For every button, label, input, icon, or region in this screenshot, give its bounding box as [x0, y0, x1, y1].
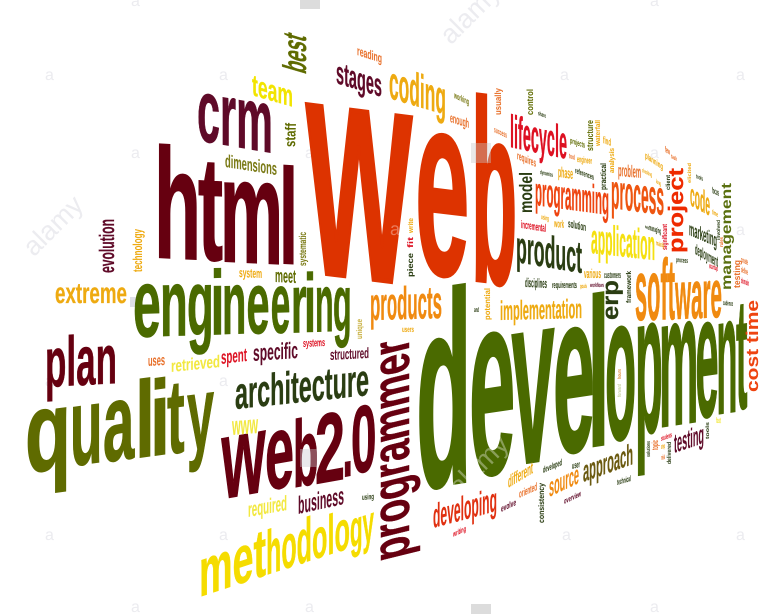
small words: lower-right region: developed: [543, 457, 562, 475]
small words: left region: staff: [281, 123, 299, 147]
small words: middle-right region: write: [407, 218, 415, 233]
word: quality: y: [187, 354, 214, 474]
small words: lower-right region: step: [661, 442, 665, 451]
small words: upper-centre region: checking: [642, 167, 652, 178]
small words: middle-right region: [406, 213, 633, 320]
small words: left region: spent: [221, 344, 247, 368]
word cloud: plan: [45, 320, 117, 402]
small words: middle-right region: framework: [625, 271, 633, 303]
small words: lower-right region: different: [508, 458, 533, 492]
small words: far-right cluster: involved: [715, 220, 721, 240]
word: development: o: [605, 249, 636, 487]
word: methodology: gy: [350, 493, 374, 559]
stock photo watermarks: a: [45, 526, 54, 544]
stock photo watermarks: a: [560, 66, 569, 84]
small words: middle-right region: solution: [568, 217, 586, 233]
small words: far-right cluster: startup: [709, 262, 718, 273]
word: html: [154, 117, 298, 297]
word: quality: [25, 354, 214, 498]
word: crm: crm: [197, 60, 273, 173]
word: development: m: [659, 253, 698, 468]
word: development: d: [416, 236, 472, 549]
word: methodology: [199, 493, 374, 612]
small words: middle-right region: goals: [580, 283, 587, 289]
word cloud: tools: [696, 173, 703, 182]
small words: middle-right region: and: [474, 306, 479, 314]
small words: upper-centre region: analysis: [608, 148, 616, 173]
small words: upper-centre region: client: [665, 175, 671, 190]
small words: lower-right region: fast: [716, 416, 721, 425]
word: html: h: [154, 117, 201, 294]
word cloud: code: [690, 176, 710, 223]
watermarks over the words: alamy: [442, 429, 515, 501]
word cloud: structured: [330, 344, 369, 363]
word cloud: product: [516, 221, 582, 283]
small words: far-right cluster: cadence: [723, 299, 733, 308]
small words: lower-right region: [453, 369, 721, 539]
word: quality: u: [70, 363, 103, 490]
word: engineering: n: [222, 252, 246, 354]
word: engineering: r: [291, 257, 307, 351]
small words: left region: systems: [303, 336, 325, 349]
word: methodology: met: [199, 514, 266, 612]
small words: lower-right region: user: [572, 459, 580, 471]
small words: far-right cluster: significant: [661, 224, 669, 250]
word cloud: evolution: [95, 219, 119, 273]
small words: left region: reading: [357, 43, 382, 66]
word: quality: l: [135, 358, 155, 482]
word cloud: source: [549, 459, 579, 503]
word: Web: [306, 37, 517, 342]
small words: far-right cluster: process: [676, 256, 688, 265]
word cloud: model: [516, 172, 536, 213]
word: erp: erp: [597, 280, 623, 320]
stock photo watermarks: a: [736, 66, 745, 84]
word: development: l: [588, 255, 609, 493]
word: development: e: [469, 236, 515, 534]
word: engineering: e: [133, 249, 161, 358]
word cloud: team: [252, 68, 293, 114]
small words: far-right cluster: mainly: [656, 239, 664, 250]
word cloud: hours: [616, 369, 622, 379]
stock photo watermarks: a: [736, 221, 745, 239]
small words: upper-centre region: share: [538, 110, 546, 119]
word cloud: structure: [585, 120, 595, 151]
small words: lower-right region: technical: [617, 474, 631, 487]
small words: upper-centre region: problem: [618, 161, 641, 182]
stock photo watermarks: a: [45, 66, 54, 84]
small words: left region: system: [239, 265, 262, 281]
word cloud: create: [741, 255, 748, 267]
word: engineering: i: [210, 252, 225, 355]
word: web2.0: 0: [351, 384, 376, 495]
word cloud: coding: [389, 56, 446, 125]
word cloud: specific: [253, 337, 298, 366]
word: software: soft: [635, 242, 675, 339]
small words: lower-right region: tools: [704, 422, 710, 439]
small words: middle-right region: workflows: [590, 282, 604, 288]
word: development: v: [512, 238, 555, 519]
small words: upper-centre region: phase: [558, 163, 573, 182]
small words: left region: www: [232, 410, 258, 441]
small words: upper-centre region: few: [665, 144, 670, 157]
small words: upper-centre region: dynamics: [540, 169, 553, 178]
small words: far-right cluster: focus: [712, 185, 719, 198]
small words: middle-right region: piece: [406, 253, 415, 277]
word: development: [416, 236, 748, 549]
small words: left region: systematic: [297, 232, 308, 266]
small words: lower-right region: students: [661, 431, 672, 443]
word cloud: control: [525, 89, 535, 115]
small words: left region: uses: [148, 351, 165, 369]
stock photo watermarks: a: [45, 372, 54, 390]
word: quality: q: [25, 365, 71, 498]
word: quality: a: [103, 359, 135, 486]
small words: far-right cluster: managing: [649, 223, 661, 236]
word cloud: lifecycle: [510, 106, 567, 169]
small words: middle-right region: fit: [406, 237, 415, 248]
small words: middle-right region: potential: [483, 288, 492, 320]
small words: left region: required: [248, 491, 287, 522]
small words: lower-right region: oriented: [519, 480, 537, 500]
stock photo watermarks: a: [650, 144, 659, 162]
word: engineering: n: [315, 257, 334, 350]
small words: lower-right region: risk: [661, 453, 665, 462]
stock photo watermarks: a: [219, 526, 228, 544]
small words: lower-right region: evolve: [501, 497, 516, 514]
word: Web: b: [471, 48, 517, 342]
small words: left region: unique: [355, 319, 364, 339]
word: development: e: [553, 243, 595, 504]
word cloud: users: [402, 325, 414, 334]
small words: middle-right region: using: [541, 213, 549, 223]
word: web2.0: 2: [315, 390, 345, 506]
word: engineering: i: [304, 257, 316, 350]
small words: middle-right region: requirements: [552, 280, 577, 290]
small words: upper-centre region: tool: [569, 152, 575, 162]
word cloud: define: [741, 265, 748, 277]
stock photo watermarks: alamy: [17, 189, 89, 262]
word: engineering: e: [271, 255, 290, 352]
small words: left region: using: [362, 492, 374, 502]
watermarks over the words: [300, 143, 515, 501]
small words: far-right cluster: time: [712, 208, 718, 219]
small words: upper-centre region: projects: [570, 136, 585, 150]
small words: lower-right region: forward: [616, 384, 622, 397]
small words: middle-right region: work: [554, 217, 564, 230]
word: web2.0: e: [265, 390, 294, 514]
word: development: e: [695, 258, 719, 456]
word: engineering: e: [246, 254, 270, 353]
word: web2.0: b: [293, 398, 318, 508]
word cloud: extreme: [55, 277, 127, 309]
small words: lower-right region: consistency: [537, 483, 546, 523]
stock photo watermarks: a: [562, 526, 571, 544]
word: html: l: [279, 141, 298, 294]
small words: upper-centre region: task: [671, 153, 677, 162]
small words: middle-right region: disciplines: [525, 275, 547, 291]
stock photo watermarks: a: [219, 372, 228, 390]
small words: middle-right region: various: [584, 266, 601, 281]
small words: upper-centre region: planning: [645, 150, 663, 172]
small words: far-right cluster: web: [645, 223, 649, 231]
word: methodology: olo: [312, 498, 350, 572]
small words: middle-right region: incremental: [521, 218, 546, 234]
word: quality: i: [150, 358, 170, 479]
small words: upper-centre region: success: [494, 125, 507, 140]
small words: far-right cluster: rules: [718, 237, 724, 247]
word: web2.0: [221, 384, 376, 524]
word: web2.0: w: [221, 388, 266, 524]
small words: lower-right region: delivered: [666, 442, 672, 464]
word: engineering: g: [333, 258, 352, 349]
small words: lower-right region: topic: [650, 440, 660, 450]
word: web2.0: .: [342, 390, 353, 498]
small words: lower-right region: solutions: [645, 441, 651, 457]
small words: far-right cluster: [645, 185, 749, 308]
small words: left region: meet: [275, 265, 296, 287]
word: development: n: [716, 260, 737, 451]
word: html: m: [220, 128, 283, 297]
small words: upper-centre region: practical: [599, 163, 608, 190]
word: methodology: hod: [266, 504, 312, 589]
small words: upper-centre region: elicited: [686, 163, 692, 183]
small words: far-right cluster: testing: [732, 260, 742, 288]
small words: upper-centre region: waterfall: [594, 120, 602, 146]
word: Web: e: [415, 37, 470, 335]
word cloud: developing: [433, 480, 497, 535]
word cloud: products: [370, 277, 442, 330]
word: html: t: [198, 126, 223, 293]
small words: left region: technology: [130, 229, 145, 272]
small words: left region: retrieved: [171, 352, 220, 376]
word cloud: stages: [336, 54, 382, 104]
stock photo watermarks: a: [131, 144, 140, 162]
word: development: t: [736, 265, 748, 444]
word cloud: business: [298, 481, 344, 520]
word cloud: cost time: [743, 300, 762, 392]
small words: upper-centre region: enough: [450, 110, 469, 131]
small words: upper-centre region: working: [454, 90, 469, 107]
word: quality: t: [167, 357, 185, 477]
watermarks over the words: a: [390, 219, 400, 239]
word cloud: customers: [604, 270, 621, 280]
stock photo watermarks: a: [736, 526, 745, 544]
word: engineering: g: [187, 251, 214, 355]
word: engineering: n: [160, 250, 188, 357]
word: Web: W: [306, 53, 413, 338]
small words: upper-centre region: references: [575, 166, 594, 182]
word: engineering: [133, 249, 352, 358]
small words: left region: dimensions: [225, 151, 277, 179]
small words: upper-centre region: engineer: [577, 154, 592, 166]
word: development: p: [635, 250, 663, 478]
small words: upper-centre region: find: [603, 134, 611, 148]
small words: lower-right region: overview: [564, 489, 581, 506]
small words: upper-centre region: [450, 88, 703, 190]
small words: upper-centre region: requires: [517, 149, 536, 169]
small words: upper-centre region: long: [656, 178, 661, 187]
stock photo watermarks: a: [305, 144, 314, 162]
small words: left region: [130, 43, 414, 522]
stock photo watermarks: a: [219, 66, 228, 84]
small words: lower-right region: writing: [453, 524, 466, 539]
word cloud: usually: [493, 88, 503, 115]
